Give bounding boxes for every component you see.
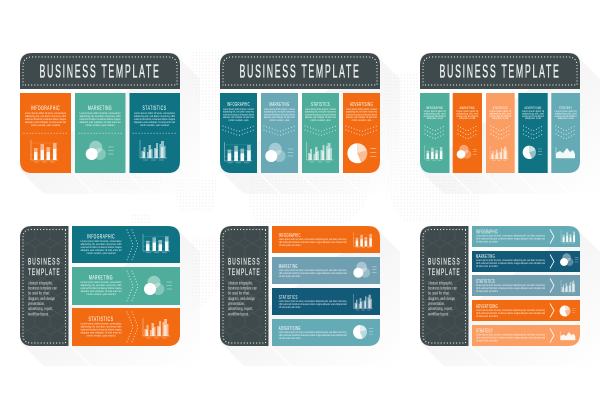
row: advertising: ADVERTISING <box>279 326 301 332</box>
row: marketing: nibh euismod tincidunt ut laoreet dolore magna aliquam erat volutpat wisi <box>279 272 347 275</box>
venn diagram <box>86 141 114 160</box>
row: infographic: nibh euismod tincidunt ut laoreet dolore magna aliquam erat volutpat wisi <box>476 238 545 240</box>
row: marketing: aliquam erat volutpat. Ut wisi enim ad <box>80 290 122 293</box>
column: statistics: STATISTICS <box>493 105 508 110</box>
row: advertising: Lorem ipsum dolor sit amet, consectetur adipiscing elit, sed diam nonummy <box>279 331 347 334</box>
column: statistics: euismod tincidunt ut laoreet dolore <box>305 113 336 116</box>
header banner <box>20 53 180 89</box>
column: statistics: minim veniam, quis <box>310 119 331 122</box>
row: marketing: Lorem ipsum dolor sit amet, consectetur <box>80 281 122 284</box>
column: advertising: Lorem ipsum dolor sit amet, consect <box>346 108 377 111</box>
column: marketing: adipiscing elit, sed <box>456 112 479 115</box>
column: infographic: Lorem ipsum dolor sit amet, consect <box>223 108 254 111</box>
column: infographic: minim veniam, quis nostrud <box>31 124 61 127</box>
row: infographic: INFOGRAPHIC <box>476 230 498 236</box>
column: marketing: MARKETING <box>270 102 290 108</box>
chevron <box>550 304 554 318</box>
sidebar: business template can <box>428 286 457 290</box>
row: marketing: nibh euismod tincidunt ut laoreet dolore magna aliquam erat volutpat wisi <box>476 262 545 265</box>
row: infographic: INFOGRAPHIC <box>279 233 301 239</box>
row: statistics: Lorem ipsum dolor sit amet, consectetur adipiscing elit, sed diam nonummy <box>279 300 347 303</box>
row: marketing: euismod tincidunt ut laoreet dolore magna <box>80 287 122 290</box>
pie chart <box>560 306 575 316</box>
row: marketing: minim veniam, quis nostrud <box>86 293 116 296</box>
row: statistics: minim veniam, quis nostrud <box>86 334 116 338</box>
column: advertising: adipiscing elit, sed diam nonummy <box>346 111 378 114</box>
column: infographic: INFOGRAPHIC <box>31 105 60 112</box>
column: statistics: adipiscing elit, sed diam nonummy nibh <box>134 115 176 118</box>
row: infographic <box>272 226 380 253</box>
stepped chart <box>354 294 373 310</box>
column: statistics: STATISTICS <box>142 105 166 112</box>
row: infographic: Lorem ipsum dolor sit amet, consectetur <box>80 240 122 243</box>
stepped chart <box>143 318 170 338</box>
venn diagram <box>144 276 172 295</box>
stepped chart <box>306 142 334 162</box>
row: strategy: Ut wisi enim ad minim <box>476 340 498 342</box>
row: marketing: MARKETING <box>89 274 113 282</box>
row: statistics: STATISTICS <box>279 295 298 301</box>
row: infographic: adipiscing elit, sed diam nonummy nibh <box>80 243 122 246</box>
column: infographic: aliquam erat <box>427 117 443 120</box>
panel: four row template <box>220 226 380 346</box>
row: advertising: Ut wisi enim ad minim <box>279 337 301 340</box>
panel: three column template <box>20 53 180 173</box>
bar chart <box>224 142 252 163</box>
sidebar <box>220 226 268 346</box>
column: strategy <box>551 93 580 173</box>
row: marketing: adipiscing elit, sed diam nonummy nibh <box>80 284 122 287</box>
row: infographic: Lorem ipsum dolor sit amet, consectetur adipiscing elit, sed diam nonummy <box>476 234 546 238</box>
column: marketing: Lorem ipsum dolor sit amet, consect <box>264 108 295 111</box>
column: marketing: MARKETING <box>460 105 475 110</box>
column: advertising: euismod tincidunt ut laoreet dolore <box>346 113 377 116</box>
sidebar: TEMPLATE <box>228 266 261 277</box>
sidebar: BUSINESS <box>28 255 61 266</box>
pie chart <box>347 143 376 163</box>
sidebar: be used for chart, <box>228 291 250 296</box>
column: marketing: adipiscing elit, sed diam nonummy <box>264 111 296 114</box>
area chart <box>560 331 575 340</box>
venn diagram <box>560 253 579 266</box>
row: advertising: ADVERTISING <box>476 304 498 310</box>
column: infographic: Lorem ipsum dolor sit amet, consectetur <box>25 112 66 115</box>
row: marketing <box>72 267 180 305</box>
bar chart <box>143 234 170 253</box>
venn diagram <box>265 143 293 162</box>
row: advertising: nibh euismod tincidunt ut laoreet dolore magna aliquam erat volutpat wisi <box>279 334 347 337</box>
column: statistics: aliquam erat volutpat. Ut wisi enim <box>305 116 336 119</box>
row: statistics: STATISTICS <box>88 316 114 323</box>
row: statistics: Ut wisi enim ad minim <box>279 306 301 309</box>
row: strategy: Lorem ipsum dolor sit amet, consectetur adipiscing elit, sed diam nonummy <box>476 334 546 336</box>
sidebar: presentation, <box>28 301 45 306</box>
row: statistics: Lorem ipsum dolor sit amet, consectetur adipiscing elit, sed diam nonummy <box>476 284 546 287</box>
row: statistics <box>72 308 180 346</box>
row: advertising: nibh euismod tincidunt ut laoreet dolore magna aliquam erat volutpat wisi <box>476 312 545 315</box>
chevron <box>550 278 554 292</box>
column: advertising: aliquam erat volutpat. Ut wisi enim <box>346 116 377 119</box>
column: marketing: Lorem ipsum dolor sit amet, consectetur <box>80 112 121 115</box>
sidebar: advertising, report, <box>228 306 253 311</box>
sidebar: diagram, web design <box>428 296 455 301</box>
long shadows <box>20 55 600 367</box>
panel: five row template <box>420 226 580 346</box>
sidebar: workflow layout. <box>228 311 249 316</box>
column: strategy: aliquam erat <box>558 117 574 120</box>
column: infographic: adipiscing elit, sed diam nonummy nibh <box>25 115 67 118</box>
column: marketing: aliquam erat <box>459 117 476 120</box>
column: advertising: ADVERTISING <box>350 102 373 108</box>
column: advertising <box>343 93 380 173</box>
column: marketing: aliquam erat volutpat. Ut wisi enim ad <box>80 121 121 124</box>
column: strategy: euismod tincidunt <box>555 115 577 118</box>
stepped chart <box>561 280 576 293</box>
sidebar <box>420 226 468 346</box>
row: infographic <box>72 226 180 263</box>
panel: five column template <box>420 53 580 173</box>
row: advertising <box>272 319 380 346</box>
row: statistics: adipiscing elit, sed diam nonummy nibh <box>80 326 122 328</box>
column: statistics <box>302 93 339 173</box>
panel: four column template <box>220 53 380 173</box>
chevron <box>550 328 554 342</box>
sidebar: advertising, report, <box>428 306 453 311</box>
header banner: BUSINESS TEMPLATE <box>40 60 160 81</box>
row: strategy <box>472 325 580 346</box>
column: marketing <box>261 93 298 173</box>
sidebar: presentation, <box>228 301 245 306</box>
column: advertising: adipiscing elit, sed <box>522 112 545 115</box>
column: statistics: aliquam erat volutpat. Ut wisi enim ad <box>134 121 176 124</box>
panel: three row template <box>20 226 180 346</box>
row: advertising: Ut wisi enim ad minim <box>476 315 498 318</box>
column: infographic: Lorem ipsum dolor sit <box>424 110 446 113</box>
venn diagram <box>457 145 477 159</box>
column: statistics: STATISTICS <box>311 102 330 108</box>
sidebar: BUSINESS <box>228 255 261 266</box>
row: marketing <box>272 257 380 284</box>
sidebar: workflow layout. <box>28 311 49 316</box>
row: statistics: euismod tincidunt ut laoreet dolore magna <box>80 328 122 332</box>
row: strategy: nibh euismod tincidunt ut laoreet dolore magna aliquam erat volutpat wisi <box>476 336 545 340</box>
header banner <box>420 53 580 89</box>
sidebar: TEMPLATE <box>28 266 61 277</box>
row: infographic: aliquam erat volutpat. Ut wisi enim ad <box>80 249 122 252</box>
column: statistics: euismod tincidunt <box>489 115 512 118</box>
row: marketing <box>472 251 580 272</box>
column: infographic <box>420 93 450 173</box>
row: infographic: euismod tincidunt ut laoreet dolore magna <box>80 246 122 249</box>
sidebar: Abstract infographic, <box>428 280 453 285</box>
column: statistics: Lorem ipsum dolor sit <box>489 110 512 113</box>
venn diagram <box>353 262 377 278</box>
bar chart <box>561 230 576 243</box>
row: statistics: Lorem ipsum dolor sit amet, consectetur <box>80 322 122 326</box>
chevron <box>550 230 554 244</box>
column: statistics: minim veniam, quis nostrud <box>140 124 170 127</box>
column: statistics: adipiscing elit, sed diam nonummy <box>305 111 337 114</box>
row: marketing: Ut wisi enim ad minim <box>279 275 301 278</box>
sidebar: TEMPLATE <box>428 266 461 277</box>
column: statistics: Lorem ipsum dolor sit amet, consectetur <box>134 112 175 115</box>
column: marketing <box>453 93 482 173</box>
row: marketing: MARKETING <box>279 264 298 270</box>
sidebar: Abstract infographic, <box>28 280 53 285</box>
column: marketing: aliquam erat volutpat. Ut wisi enim <box>264 116 295 119</box>
row: marketing: MARKETING <box>476 254 495 260</box>
column: infographic: euismod tincidunt ut laoreet dolore magna <box>25 118 67 121</box>
column: marketing: Lorem ipsum dolor sit <box>456 110 479 113</box>
column: infographic: aliquam erat volutpat. Ut wisi enim <box>223 116 254 119</box>
column: statistics <box>486 93 515 173</box>
pie chart <box>353 325 373 339</box>
row: infographic: Ut wisi enim ad minim <box>279 244 301 247</box>
background: dotted world map <box>95 50 482 312</box>
row: advertising: Lorem ipsum dolor sit amet, consectetur adipiscing elit, sed diam nonummy <box>476 309 546 312</box>
chevron <box>550 254 554 268</box>
sidebar: diagram, web design <box>228 296 255 301</box>
column: statistics: aliquam erat <box>492 117 509 120</box>
sidebar: presentation, <box>428 301 445 306</box>
row: statistics <box>272 288 380 315</box>
column: infographic <box>20 93 71 173</box>
row: infographic: nibh euismod tincidunt ut laoreet dolore magna aliquam erat volutpat wisi <box>279 241 347 244</box>
column: strategy: adipiscing elit, sed <box>555 112 577 115</box>
stepped chart <box>140 140 167 160</box>
sidebar: be used for chart, <box>428 291 450 296</box>
bar chart <box>354 232 373 248</box>
column: statistics: euismod tincidunt ut laoreet dolore magna <box>134 118 176 121</box>
area chart <box>556 147 575 158</box>
bar chart <box>31 140 58 162</box>
sidebar: BUSINESS <box>428 255 461 266</box>
row: statistics <box>472 275 580 296</box>
column: strategy: STRATEGY <box>559 105 572 110</box>
sidebar: advertising, report, <box>28 306 53 311</box>
row: statistics: nibh euismod tincidunt ut laoreet dolore magna aliquam erat volutpat wisi <box>279 303 347 306</box>
bar chart <box>424 145 443 160</box>
column: advertising: euismod tincidunt <box>522 115 544 118</box>
column: advertising <box>518 93 548 173</box>
column: marketing: euismod tincidunt ut laoreet dolore <box>264 113 295 116</box>
row: marketing: Lorem ipsum dolor sit amet, consectetur adipiscing elit, sed diam nonummy <box>279 269 347 272</box>
stepped chart <box>490 146 508 160</box>
header banner: BUSINESS TEMPLATE <box>240 60 360 81</box>
column: infographic: INFOGRAPHIC <box>227 102 250 108</box>
column: infographic: aliquam erat volutpat. Ut wisi enim ad <box>25 121 67 124</box>
row: infographic: INFOGRAPHIC <box>87 233 115 240</box>
sidebar: diagram, web design <box>28 296 55 301</box>
row: statistics: STATISTICS <box>476 279 495 285</box>
pie chart <box>523 146 542 159</box>
column: statistics: adipiscing elit, sed <box>489 112 512 115</box>
row: infographic: minim veniam, quis nostrud <box>86 252 116 255</box>
column: statistics: Lorem ipsum dolor sit amet, consect <box>305 108 336 111</box>
column: infographic: euismod tincidunt ut laoreet dolore <box>223 113 254 116</box>
column: infographic: adipiscing elit, sed <box>424 112 446 115</box>
row: infographic: Ut wisi enim ad minim <box>476 240 498 244</box>
row: marketing: Ut wisi enim ad minim <box>476 265 498 268</box>
column: marketing: minim veniam, quis <box>270 119 290 122</box>
column: infographic: INFOGRAPHIC <box>426 105 443 110</box>
sidebar: workflow layout. <box>428 311 449 316</box>
sidebar: be used for chart, <box>28 291 50 296</box>
row: strategy: STRATEGY <box>476 328 493 334</box>
column: advertising: ADVERTISING <box>524 105 542 110</box>
row: marketing: Lorem ipsum dolor sit amet, consectetur adipiscing elit, sed diam nonummy <box>476 259 546 262</box>
column: advertising: aliquam erat <box>525 117 541 120</box>
column: marketing <box>75 93 126 173</box>
column: advertising: Lorem ipsum dolor sit <box>522 110 544 113</box>
row: advertising <box>472 300 580 321</box>
row: statistics: aliquam erat volutpat. Ut wisi enim ad <box>80 332 122 334</box>
column: infographic <box>220 93 257 173</box>
sidebar: Abstract infographic, <box>228 280 253 285</box>
header banner <box>220 53 380 89</box>
column: infographic: euismod tincidunt <box>424 115 446 118</box>
column: advertising: minim veniam, quis <box>352 119 372 122</box>
column: statistics <box>130 93 180 173</box>
column: marketing: MARKETING <box>88 105 112 112</box>
row: infographic <box>472 226 580 247</box>
column: strategy: Lorem ipsum dolor sit <box>555 110 577 113</box>
row: infographic: Lorem ipsum dolor sit amet, consectetur adipiscing elit, sed diam nonummy <box>279 238 347 241</box>
row: statistics: Ut wisi enim ad minim <box>476 290 498 293</box>
column: marketing: euismod tincidunt ut laoreet dolore magna <box>80 118 121 121</box>
column: marketing: minim veniam, quis nostrud <box>86 124 115 127</box>
row: statistics: nibh euismod tincidunt ut laoreet dolore magna aliquam erat volutpat wisi <box>476 287 545 290</box>
sidebar: business template can <box>28 286 57 290</box>
column: marketing: adipiscing elit, sed diam nonummy nibh <box>80 115 121 118</box>
sidebar: business template can <box>228 286 257 290</box>
column: infographic: adipiscing elit, sed diam nonummy <box>223 111 255 114</box>
column: marketing: euismod tincidunt <box>456 115 479 118</box>
column: infographic: minim veniam, quis <box>228 119 249 122</box>
sidebar <box>20 226 68 346</box>
